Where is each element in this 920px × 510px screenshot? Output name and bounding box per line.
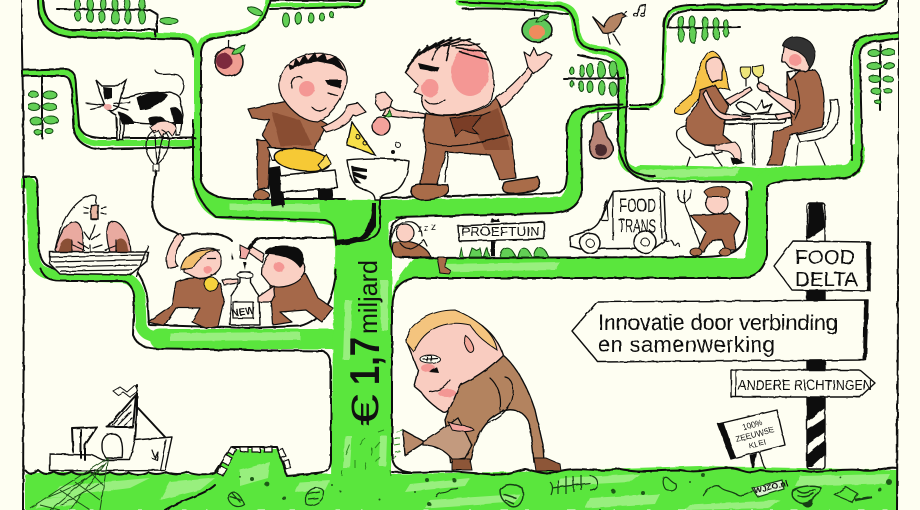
water spray (342, 430, 402, 476)
icon: bird (592, 12, 627, 45)
worm and tag (703, 485, 755, 496)
sign: andere richtingen (731, 370, 875, 397)
branch: couple top (632, 0, 885, 107)
wine glass (741, 67, 751, 79)
leaf sprig: top left (57, 0, 178, 32)
sleeping person (391, 222, 451, 274)
man at table (753, 37, 839, 165)
icon: music notes (633, 5, 646, 16)
fish dish on table (725, 100, 786, 165)
icon: green apple (522, 10, 552, 42)
legs and body (420, 98, 516, 187)
torso (248, 101, 327, 150)
body and legs (445, 355, 544, 462)
snail (663, 477, 676, 491)
sign: innovatie door verbinding: Innovatie door verbinding (598, 310, 838, 335)
central man juggling (372, 38, 552, 200)
proeftuin sign and bushes (458, 218, 549, 257)
hair (406, 310, 497, 352)
sign: zeeuwse klei: ZEEUWSE (735, 425, 775, 444)
branch: top left (41, 0, 197, 150)
cheese wedge (347, 122, 375, 155)
sign: andere richtingen: ANDERE RICHTINGEN (738, 377, 872, 394)
worm left (436, 488, 458, 497)
head (405, 40, 494, 115)
sign: food delta: DELTA (795, 269, 859, 291)
sign: food delta: FOOD (795, 247, 855, 269)
icon: red apple (215, 41, 245, 76)
sign: zeeuwse klei: KLEI (748, 438, 767, 451)
sleeping person: z (431, 222, 436, 233)
branch: right top (460, 2, 850, 172)
fish bone (550, 475, 598, 495)
farmer with pitchfork (678, 187, 740, 256)
euro amount label on trunk: miljard (353, 260, 383, 334)
two men with bottle: NEW (231, 306, 256, 319)
wine glass (753, 65, 764, 77)
leaf sprig: top right (670, 16, 740, 43)
sleeping person: z (418, 224, 423, 234)
head (406, 312, 503, 412)
sign: food delta (774, 241, 870, 291)
hair (405, 38, 488, 72)
bottle (230, 272, 260, 325)
boat with two people and lantern (50, 195, 148, 276)
bowl (336, 142, 409, 245)
cheese wheel (273, 145, 331, 175)
two men with bottle (148, 233, 333, 328)
sleeping person: z (424, 223, 429, 233)
leaf sprig: far right (867, 44, 895, 110)
twig: upper centre (199, 0, 268, 55)
food transport van: FOOD (619, 196, 656, 217)
leaf sprig: upper centre (246, 4, 334, 27)
hill ladder (217, 447, 291, 476)
branch: cow (23, 72, 196, 143)
head (279, 53, 347, 122)
man with cheese (248, 52, 375, 207)
ground (25, 449, 897, 510)
fishing boat (50, 385, 172, 471)
twig: top (270, 0, 364, 5)
shell (500, 484, 523, 507)
branch: left low (24, 183, 335, 338)
peach (372, 117, 390, 135)
euro amount label on trunk: 1,7 (341, 337, 388, 385)
cow (86, 70, 184, 140)
euro amount label on trunk (341, 260, 388, 426)
arm raised (496, 65, 534, 108)
food transport van (570, 188, 680, 253)
soil specks (239, 473, 892, 510)
leaf sprig: left (28, 75, 58, 138)
sign: zeeuwse klei (718, 410, 785, 468)
woman at table (674, 51, 752, 166)
branch: cheese maker ground (192, 104, 625, 330)
shell (306, 488, 324, 505)
sign: innovatie door verbinding: en samenwerking (598, 332, 775, 357)
milking tube (146, 130, 178, 234)
fishing net (30, 458, 108, 510)
hair (288, 52, 346, 72)
man right (270, 274, 333, 325)
gardener with watering can (403, 310, 561, 471)
leg and foot (257, 140, 270, 190)
wwzo tag text: WJZO.nl (753, 478, 789, 496)
shoes (452, 459, 472, 470)
discarded tin (835, 487, 858, 502)
ground highlights (35, 168, 890, 510)
sign: innovatie door verbinding (572, 300, 868, 362)
arm reaching (382, 105, 425, 118)
man left (148, 278, 224, 328)
leaf sprig: centre right (564, 61, 624, 96)
icon: pear (589, 112, 613, 159)
signpost pole (807, 203, 825, 469)
proeftuin sign and bushes: PROEFTUIN (461, 224, 540, 239)
branch: far right (856, 36, 898, 150)
trunk (331, 190, 767, 480)
arm (322, 103, 366, 132)
soil debris (228, 475, 872, 507)
big shell (792, 486, 821, 503)
euro amount label on trunk: € (345, 394, 387, 426)
watering can (403, 430, 425, 455)
sign: zeeuwse klei: 100% (741, 418, 763, 432)
food transport van: TRANS (618, 216, 656, 238)
shell (228, 493, 244, 506)
shoes (411, 184, 449, 200)
stool and table (266, 166, 333, 207)
